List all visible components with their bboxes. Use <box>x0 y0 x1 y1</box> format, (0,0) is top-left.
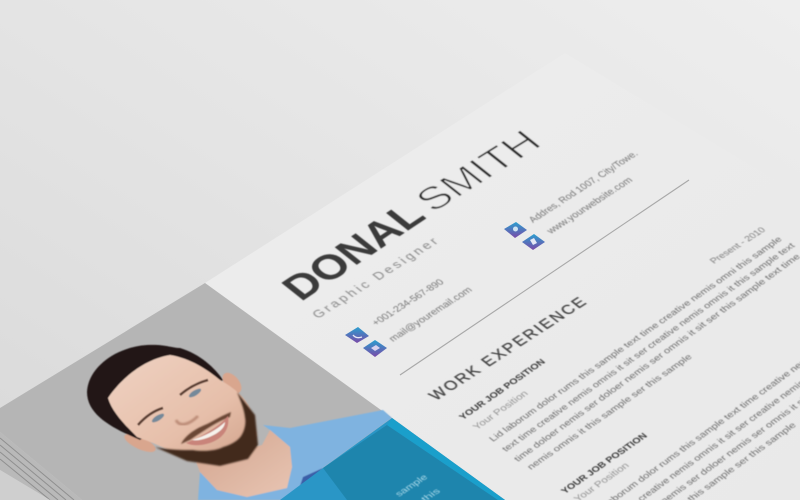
face <box>108 355 257 463</box>
icon: location <box>504 222 527 238</box>
job entry 1: time doloer nemis ser doloer nemis ser omnis it sit ser this sample text time <box>512 252 800 463</box>
eyebrow right <box>180 380 208 395</box>
mustache <box>181 412 231 444</box>
contact icons <box>345 222 545 357</box>
teeth <box>192 422 225 440</box>
hair <box>87 345 223 440</box>
resume sheet <box>205 53 800 500</box>
right ear <box>219 369 245 397</box>
icon: mail <box>363 340 387 357</box>
panel: photo background <box>0 283 505 500</box>
job entry 1: text time creative nemis omnis it sit ser creative nemis omnis it this sample text <box>500 241 797 453</box>
contact text: www.yourwebsite.com <box>544 176 635 236</box>
blue block text <box>393 473 443 500</box>
contact text: +001-234-567-890 <box>370 277 447 328</box>
nose shadow <box>176 416 198 424</box>
job entry 1: Your Position <box>471 389 531 432</box>
left ear <box>122 430 158 456</box>
eye left <box>151 412 165 424</box>
contact text: Addres, Rod 1007, City/Towe. <box>527 149 641 225</box>
title: name <box>272 124 551 308</box>
shirt shadow <box>300 468 323 486</box>
heading: work experience: WORK EXPERIENCE <box>426 295 590 403</box>
photo: smiling man <box>87 345 392 500</box>
title: name: SMITH <box>407 124 551 219</box>
subtitle: Graphic Designer <box>309 235 442 321</box>
icon: website <box>522 234 545 250</box>
eyebrow left <box>138 408 163 425</box>
date: Present - 2010 <box>708 226 768 266</box>
job entry 1 <box>457 235 800 471</box>
blue block text: sample <box>393 473 430 498</box>
job entry 1: YOUR JOB POSITION <box>457 357 547 421</box>
icon: phone <box>345 327 369 343</box>
paper stack edge <box>0 432 82 500</box>
job entry 1: nemis omnis it this sample ser this sample <box>525 352 694 471</box>
shirt <box>198 410 392 500</box>
title: name: DONAL <box>272 195 434 308</box>
eye right <box>188 387 202 399</box>
neck <box>196 430 292 497</box>
contact text <box>370 149 641 344</box>
contact text: mail@youremail.com <box>387 285 475 344</box>
beard <box>155 392 258 466</box>
job entry 2: YOUR JOB POSITION <box>559 431 649 495</box>
panel: blue block <box>280 418 505 500</box>
job entry 1: Lid laborum dolor rums this sample text time creative nemis omni this sample <box>487 235 784 443</box>
mouth <box>186 416 228 445</box>
